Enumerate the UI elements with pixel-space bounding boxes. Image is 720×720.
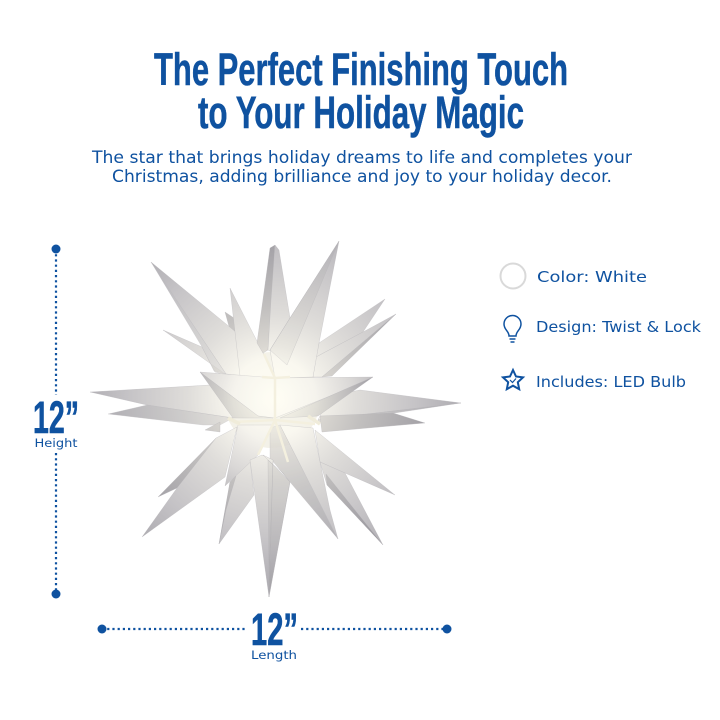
feature: includes [503,370,686,391]
subtitle text: The star that brings holiday dreams to life and completes your [91,148,632,167]
feature: design [504,316,701,342]
title [154,44,568,138]
feature: includes: Includes: LED Bulb [536,373,686,391]
subtitle text [91,148,632,186]
height dimension: 12” [33,392,79,443]
feature: color: Color: White [537,268,647,286]
title: to Your Holiday Magic [198,87,524,138]
height dimension [33,244,79,598]
feature: color [500,264,647,288]
length dimension: Length [251,648,297,662]
length dimension: 12” [251,604,298,655]
subtitle text: Christmas, adding brilliance and joy to your holiday decor. [112,167,612,186]
star illustration [90,241,461,597]
height dimension: Height [34,436,78,450]
feature: design: Design: Twist & Lock [536,318,701,336]
length dimension [98,604,452,662]
